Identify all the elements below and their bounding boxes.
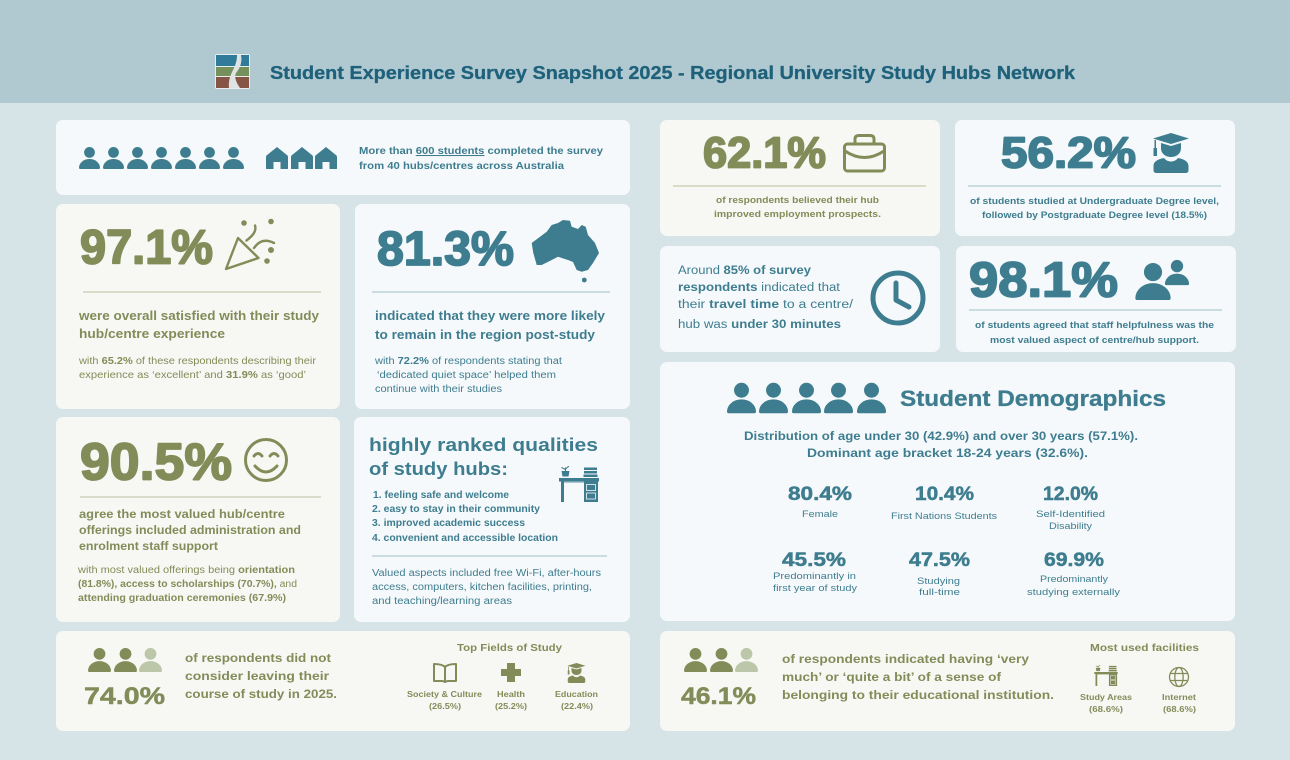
text: degree level: followed by Postgraduate Degree level (18.5%) bbox=[982, 210, 1207, 220]
text: belonging: much’ or ‘quite a bit’ of a sense of bbox=[782, 670, 1002, 684]
text: travel time: Around 85% of survey bbox=[678, 265, 812, 277]
stat: first nations bbox=[891, 484, 997, 522]
icon: two people bbox=[1135, 260, 1189, 300]
panel: course retention bbox=[56, 631, 630, 731]
statistic 46.1%: 46.1% bbox=[681, 683, 756, 710]
statistic 74.0%: 74.0% bbox=[84, 683, 165, 710]
text: valued aspects bbox=[372, 568, 601, 607]
text: degree level bbox=[970, 196, 1219, 220]
label: internet: Internet bbox=[1162, 692, 1196, 702]
icon: study desk bbox=[1094, 665, 1118, 686]
text: employment bbox=[714, 195, 881, 219]
text: region detail: ‘dedicated quiet space’ helped them bbox=[377, 370, 556, 381]
text: travel time: their travel time to a centre/ bbox=[678, 299, 854, 311]
text: employment: improved employment prospects. bbox=[714, 209, 881, 219]
icon: graduate bbox=[1153, 133, 1189, 173]
icon: five people bbox=[727, 383, 886, 413]
icon: three people bbox=[88, 648, 162, 672]
text: offerings detail bbox=[77, 565, 297, 604]
ranked list: 2. easy to stay in their community bbox=[372, 504, 540, 515]
text: degree level: of students studied at Undergraduate Degree level, bbox=[970, 196, 1219, 206]
text: retention: of respondents did not bbox=[185, 651, 331, 665]
stat: first year: Predominantly in bbox=[773, 571, 856, 582]
icon: party popper bbox=[226, 220, 274, 269]
label: education: (22.4%) bbox=[561, 701, 593, 711]
stat: female: Female bbox=[802, 509, 838, 520]
heading: most used facilities: Most used facilities bbox=[1090, 642, 1199, 654]
icon: three people bbox=[684, 648, 758, 672]
text: belonging: belonging to their educational institution. bbox=[782, 688, 1054, 702]
statistic 98.1%: 98.1% bbox=[969, 254, 1118, 308]
statistic 90.5%: 90.5% bbox=[80, 434, 232, 492]
stat: externally: Predominantly bbox=[1040, 574, 1108, 585]
text: satisfaction detail: with 65.2% of these respondents describing their bbox=[78, 356, 317, 367]
text: belonging bbox=[782, 652, 1054, 702]
panel: travel time bbox=[660, 246, 940, 352]
icon: health cross bbox=[501, 663, 521, 682]
label: study areas: (68.6%) bbox=[1089, 704, 1123, 714]
panel: degree level bbox=[955, 120, 1235, 236]
text: satisfaction detail: experience as ‘excellent’ and 31.9% as ‘good’ bbox=[79, 370, 306, 381]
text: retention bbox=[185, 651, 337, 701]
text: employment: of respondents believed their hub bbox=[716, 195, 879, 205]
stat: disability bbox=[1036, 484, 1105, 532]
icon: clock bbox=[873, 273, 923, 323]
text: satisfaction headline: hub/centre experience bbox=[79, 326, 225, 341]
stat: externally bbox=[1027, 550, 1120, 598]
statistic 81.3%: 81.3% bbox=[377, 223, 514, 276]
stat: full-time: Studying bbox=[917, 576, 960, 587]
text: survey reach: More than 600 students completed the survey bbox=[359, 145, 603, 157]
text: staff helpfulness bbox=[975, 320, 1214, 345]
stat: female: 80.4% bbox=[788, 484, 852, 505]
icon: desk bbox=[559, 466, 599, 502]
label: internet: (68.6%) bbox=[1163, 704, 1196, 714]
text: staff helpfulness: most valued aspect of centre/hub support. bbox=[990, 335, 1199, 345]
label: internet bbox=[1162, 692, 1196, 714]
text: satisfaction headline: were overall satisfied with their study bbox=[78, 308, 320, 323]
text: region headline bbox=[375, 308, 606, 342]
title: Student Experience Survey Snapshot 2025 - Regional University Study Hubs Network bbox=[270, 62, 1076, 83]
icon: Australia map bbox=[532, 220, 599, 282]
text: offerings headline bbox=[79, 509, 301, 553]
text: satisfaction detail bbox=[78, 356, 317, 381]
text: travel time: respondents indicated that bbox=[678, 282, 841, 294]
text: survey reach bbox=[359, 145, 603, 172]
ranked list bbox=[372, 490, 558, 544]
text: valued aspects: Valued aspects included free Wi-Fi, after-hours bbox=[372, 568, 601, 579]
text: region detail bbox=[374, 356, 562, 395]
text: travel time bbox=[678, 265, 854, 331]
stat: first year: first year of study bbox=[773, 583, 857, 594]
statistic 97.1%: 97.1% bbox=[80, 222, 213, 274]
text: retention: course of study in 2025. bbox=[185, 687, 337, 701]
label: health bbox=[495, 689, 527, 711]
text: survey reach: from 40 hubs/centres across Australia bbox=[359, 160, 564, 172]
panel: highly ranked qualities bbox=[354, 417, 630, 622]
text: valued aspects: access, computers, kitchen facilities, printing, bbox=[372, 582, 592, 593]
label: study areas bbox=[1080, 692, 1132, 714]
statistic 56.2%: 56.2% bbox=[1001, 128, 1136, 178]
text: age distribution: Dominant age bracket 18-24 years (32.6%). bbox=[807, 446, 1088, 460]
text: retention: consider leaving their bbox=[185, 669, 329, 683]
panel: staff helpfulness bbox=[956, 246, 1236, 352]
heading: of study hubs: bbox=[369, 458, 508, 479]
icon: education bbox=[568, 663, 586, 683]
panel: valued offerings bbox=[56, 417, 340, 622]
panel: stay in region bbox=[355, 204, 630, 409]
label: society & culture: (26.5%) bbox=[429, 701, 461, 711]
stat: disability: Self-Identified bbox=[1036, 509, 1105, 520]
ranked list: 3. improved academic success bbox=[372, 518, 525, 529]
label: health: Health bbox=[497, 689, 525, 699]
stat: externally: 69.9% bbox=[1044, 550, 1104, 571]
stat: first nations: 10.4% bbox=[915, 484, 974, 505]
header band bbox=[0, 0, 1290, 103]
panel: employment bbox=[660, 120, 940, 236]
icon: students row bbox=[79, 147, 244, 169]
text: staff helpfulness: of students agreed that staff helpfulness was the bbox=[975, 320, 1214, 330]
heading: Student Demographics bbox=[900, 386, 1166, 411]
text: region detail: continue with their studies bbox=[375, 384, 502, 395]
text: offerings detail: (81.8%), access to scholarships (70.7%), and bbox=[78, 579, 297, 590]
label: society & culture bbox=[407, 689, 482, 711]
text: offerings headline: agree the most valued hub/centre bbox=[79, 509, 285, 521]
stat: first year: 45.5% bbox=[782, 550, 846, 571]
label: health: (25.2%) bbox=[495, 701, 527, 711]
panel: overall satisfaction bbox=[56, 204, 340, 409]
ranked list: 1. feeling safe and welcome bbox=[373, 490, 509, 501]
icon: smiley bbox=[246, 440, 286, 480]
panel: survey reach bbox=[56, 120, 630, 195]
label: study areas: Study Areas bbox=[1080, 692, 1132, 702]
text: region headline: to remain in the region post-study bbox=[375, 327, 596, 342]
text: valued aspects: and teaching/learning areas bbox=[372, 596, 512, 607]
stat: disability: 12.0% bbox=[1043, 484, 1098, 505]
icon: book bbox=[434, 664, 456, 682]
label: society & culture: Society & Culture bbox=[407, 689, 482, 699]
label: education: Education bbox=[555, 689, 598, 699]
panel: sense of belonging bbox=[660, 631, 1235, 731]
stat: externally: studying externally bbox=[1027, 587, 1120, 598]
text: offerings headline: enrolment staff support bbox=[79, 541, 218, 553]
text: belonging: of respondents indicated having ‘very bbox=[782, 652, 1029, 666]
text: region headline: indicated that they were more likely bbox=[375, 308, 606, 323]
stat: first year bbox=[773, 550, 857, 594]
text: age distribution: Distribution of age under 30 (42.9%) and over 30 years (57.1%). bbox=[744, 429, 1138, 443]
text: offerings detail: with most valued offerings being orientation bbox=[77, 565, 295, 576]
text: age distribution bbox=[744, 429, 1138, 460]
text: offerings detail: attending graduation ceremonies (67.9%) bbox=[78, 593, 286, 604]
ranked list: 4. convenient and accessible location bbox=[372, 533, 558, 544]
icon: hubs row bbox=[266, 147, 337, 169]
stat: female bbox=[788, 484, 852, 520]
text: travel time: hub was under 30 minutes bbox=[678, 319, 841, 331]
text: offerings headline: offerings included administration and bbox=[79, 525, 301, 537]
stat: first nations: First Nations Students bbox=[891, 511, 997, 522]
icon: globe bbox=[1170, 668, 1188, 686]
heading bbox=[369, 434, 598, 479]
stat: full-time: full-time bbox=[919, 587, 960, 598]
panel: student demographics bbox=[660, 362, 1235, 621]
heading: highly ranked qualities bbox=[369, 434, 598, 455]
label: education bbox=[555, 689, 598, 711]
stat: disability: Disability bbox=[1049, 521, 1092, 532]
logo bbox=[215, 54, 250, 89]
stat: full-time: 47.5% bbox=[909, 550, 970, 571]
statistic 62.1%: 62.1% bbox=[703, 128, 826, 178]
text: region detail: with 72.2% of respondents stating that bbox=[374, 356, 562, 367]
heading: top fields: Top Fields of Study bbox=[457, 642, 562, 654]
stat: full-time bbox=[909, 550, 970, 598]
text: satisfaction headline bbox=[78, 308, 320, 341]
icon: briefcase bbox=[844, 136, 884, 171]
